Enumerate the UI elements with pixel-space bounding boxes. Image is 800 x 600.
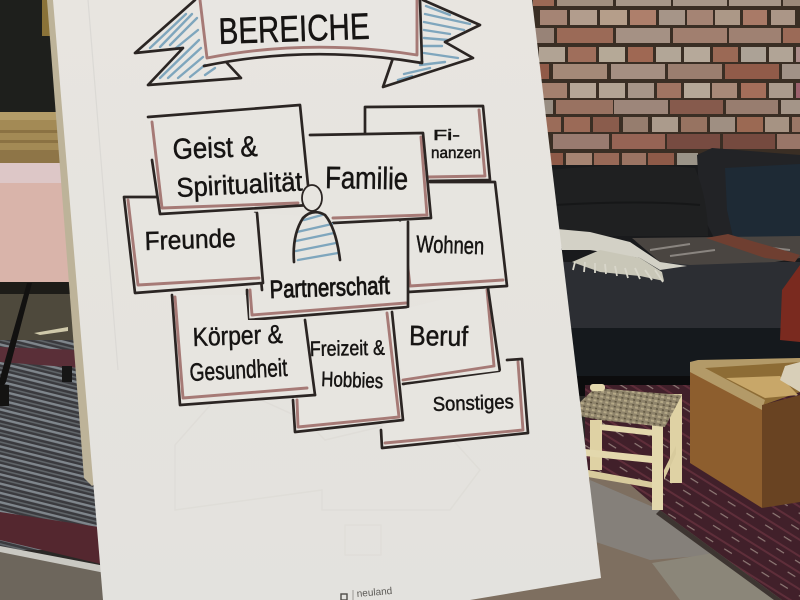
- box: Finanzen: nanzen: [431, 145, 481, 162]
- label: Partnerschaft: Partnerschaft: [269, 272, 390, 304]
- left ribbon tail: [135, 0, 241, 85]
- background: floor and red rug: [460, 385, 800, 600]
- wooden box: [690, 358, 800, 508]
- banner: BEREICHE: [135, 0, 480, 87]
- flipchart sheet: [53, 0, 601, 600]
- box: Geist und Spiritualitaet: Geist &: [172, 131, 258, 166]
- box: Freizeit und Hobbies: Hobbies: [321, 368, 384, 393]
- box: Beruf: [392, 288, 500, 384]
- box: Familie: Familie: [325, 160, 408, 196]
- box: Koerper und Gesundheit: Gesundheit: [189, 354, 288, 387]
- box: Finanzen: [365, 106, 490, 181]
- box: Familie: [310, 133, 431, 223]
- box: Geist und Spiritualitaet: [148, 105, 310, 214]
- box: Freunde: [124, 197, 263, 293]
- box: Wohnen: [400, 182, 507, 292]
- stool: [578, 384, 682, 510]
- banner title: BEREICHE: [218, 6, 370, 52]
- box: Partnerschaft: [247, 213, 408, 320]
- box: Wohnen: Wohnen: [416, 231, 485, 260]
- right ribbon tail: [383, 0, 480, 87]
- box: Sonstiges: [381, 359, 528, 448]
- background: brick wall: [525, 0, 800, 175]
- background: left side of the room: [0, 0, 110, 600]
- box: Koerper und Gesundheit: [172, 295, 315, 405]
- box: Freizeit und Hobbies: Freizeit &: [310, 337, 385, 361]
- box: Sonstiges: Sonstiges: [432, 391, 514, 416]
- icon: person: [293, 185, 340, 262]
- box: Beruf: Beruf: [409, 320, 469, 352]
- background: sofa with cushions and blankets: [540, 148, 800, 396]
- box: Freunde: Freunde: [144, 223, 236, 256]
- back sheet of the flipchart: [47, 0, 100, 486]
- box: Freizeit und Hobbies: [293, 312, 403, 432]
- logo: neuland: neuland: [356, 586, 393, 600]
- box: Koerper und Gesundheit: Körper &: [192, 319, 283, 352]
- box: Finanzen: Fi-: [433, 127, 460, 144]
- box: Geist und Spiritualitaet: Spiritualität: [176, 166, 304, 203]
- centre of the banner: [199, 0, 422, 66]
